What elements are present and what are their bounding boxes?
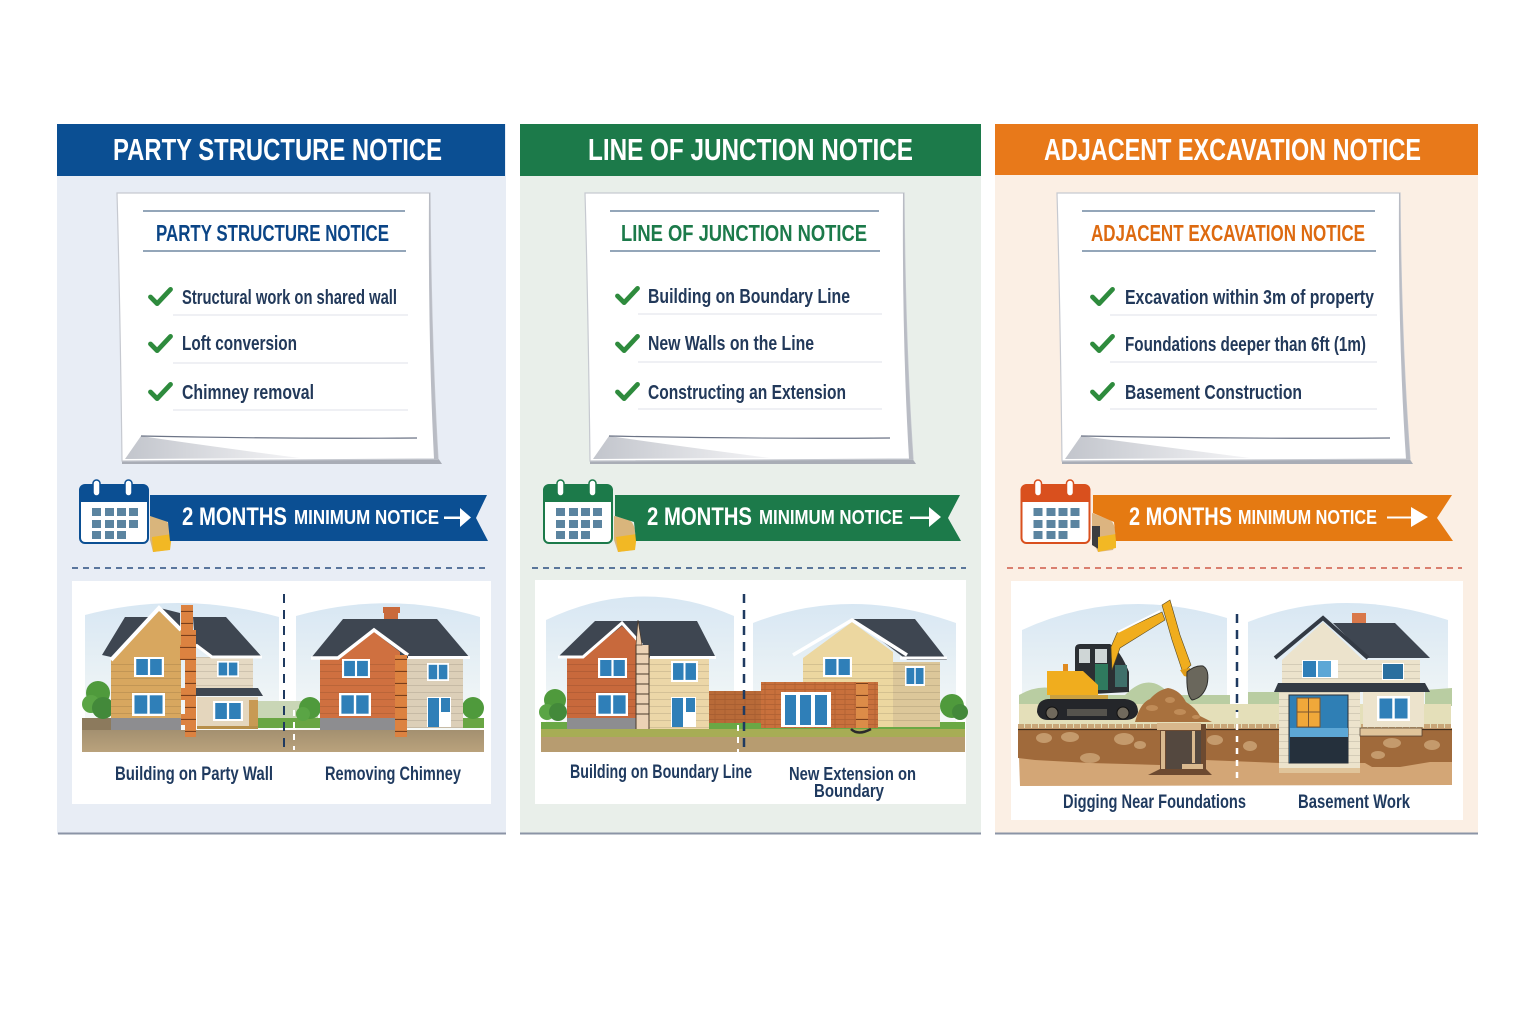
paper notice card: ADJACENT EXCAVATION NOTICE bbox=[1091, 220, 1365, 246]
arrow bbox=[910, 507, 941, 527]
checklist item: Foundations deeper than 6ft (1m) bbox=[1125, 334, 1366, 356]
checklist item bbox=[617, 333, 882, 362]
caption: Boundary bbox=[814, 781, 884, 801]
checklist item: Chimney removal bbox=[182, 382, 314, 404]
caption: Basement Work bbox=[1298, 792, 1410, 813]
boundary divider bbox=[1236, 614, 1238, 712]
paper notice card bbox=[1057, 193, 1413, 464]
checklist item: Building on Boundary Line bbox=[648, 286, 850, 308]
illustration card bbox=[72, 581, 491, 804]
heading: line of junction notice bbox=[520, 124, 981, 176]
panel: line of junction notice bbox=[520, 124, 981, 834]
checklist item bbox=[150, 333, 408, 363]
house: basement work bbox=[1274, 613, 1430, 773]
caption: Removing Chimney bbox=[325, 764, 461, 785]
notice ribbon with calendar bbox=[544, 480, 961, 552]
illustration card bbox=[1011, 581, 1463, 820]
caption: New Extension on bbox=[789, 764, 916, 784]
house: building on party wall bbox=[82, 605, 263, 737]
checklist item: Loft conversion bbox=[182, 333, 297, 355]
boundary fence bbox=[709, 691, 761, 723]
notice ribbon with calendar: MINIMUM NOTICE bbox=[1238, 507, 1377, 529]
arrow bbox=[444, 508, 471, 527]
checklist item: Excavation within 3m of property bbox=[1125, 287, 1375, 309]
checklist item: New Walls on the Line bbox=[648, 333, 814, 355]
notice ribbon with calendar bbox=[80, 480, 488, 552]
excavator bbox=[1037, 600, 1208, 720]
paper notice card: PARTY STRUCTURE NOTICE bbox=[156, 220, 389, 246]
heading: party structure notice: PARTY STRUCTURE NOTICE bbox=[113, 132, 442, 167]
caption: Building on Party Wall bbox=[115, 764, 273, 785]
heading: adjacent excavation notice bbox=[995, 124, 1478, 175]
house: new extension on boundary bbox=[761, 619, 968, 732]
paper notice card bbox=[585, 193, 916, 464]
house: removing chimney bbox=[296, 607, 484, 737]
checklist item: Basement Construction bbox=[1125, 382, 1302, 404]
arrow bbox=[1387, 507, 1428, 527]
caption bbox=[789, 764, 916, 801]
notice ribbon with calendar: MINIMUM NOTICE bbox=[294, 507, 439, 529]
heading: adjacent excavation notice: ADJACENT EXCAVATION NOTICE bbox=[1044, 132, 1421, 167]
notice ribbon with calendar: 2 MONTHS bbox=[182, 503, 287, 531]
foundation pit bbox=[1148, 723, 1212, 775]
boundary divider bbox=[743, 594, 745, 752]
notice ribbon with calendar: 2 MONTHS bbox=[647, 503, 752, 531]
dirt pile bbox=[1135, 688, 1212, 722]
checklist item bbox=[1092, 334, 1377, 362]
checklist item bbox=[150, 382, 408, 410]
checklist item: Constructing an Extension bbox=[648, 382, 846, 404]
notice ribbon with calendar bbox=[1022, 480, 1453, 552]
checklist item bbox=[1092, 287, 1377, 315]
notice ribbon with calendar: 2 MONTHS bbox=[1129, 503, 1232, 531]
notice ribbon with calendar: MINIMUM NOTICE bbox=[759, 507, 903, 529]
checklist item bbox=[1092, 382, 1377, 409]
paper notice card bbox=[117, 193, 442, 464]
panel: adjacent excavation notice bbox=[995, 124, 1478, 834]
panel: party structure notice bbox=[57, 124, 506, 834]
checklist item bbox=[617, 382, 882, 409]
checklist item bbox=[617, 286, 882, 314]
checklist item bbox=[150, 287, 408, 315]
boundary divider bbox=[283, 594, 285, 752]
caption: Digging Near Foundations bbox=[1063, 792, 1246, 813]
heading: line of junction notice: LINE OF JUNCTION NOTICE bbox=[588, 132, 913, 167]
party wall brick column bbox=[180, 605, 196, 737]
illustration card bbox=[535, 580, 968, 804]
caption: Building on Boundary Line bbox=[570, 762, 752, 783]
house: building on boundary line bbox=[539, 620, 716, 729]
extension bbox=[761, 682, 878, 732]
chimney bbox=[383, 607, 400, 635]
checklist item: Structural work on shared wall bbox=[182, 287, 397, 309]
heading: party structure notice bbox=[57, 124, 505, 176]
paper notice card: LINE OF JUNCTION NOTICE bbox=[621, 220, 867, 246]
